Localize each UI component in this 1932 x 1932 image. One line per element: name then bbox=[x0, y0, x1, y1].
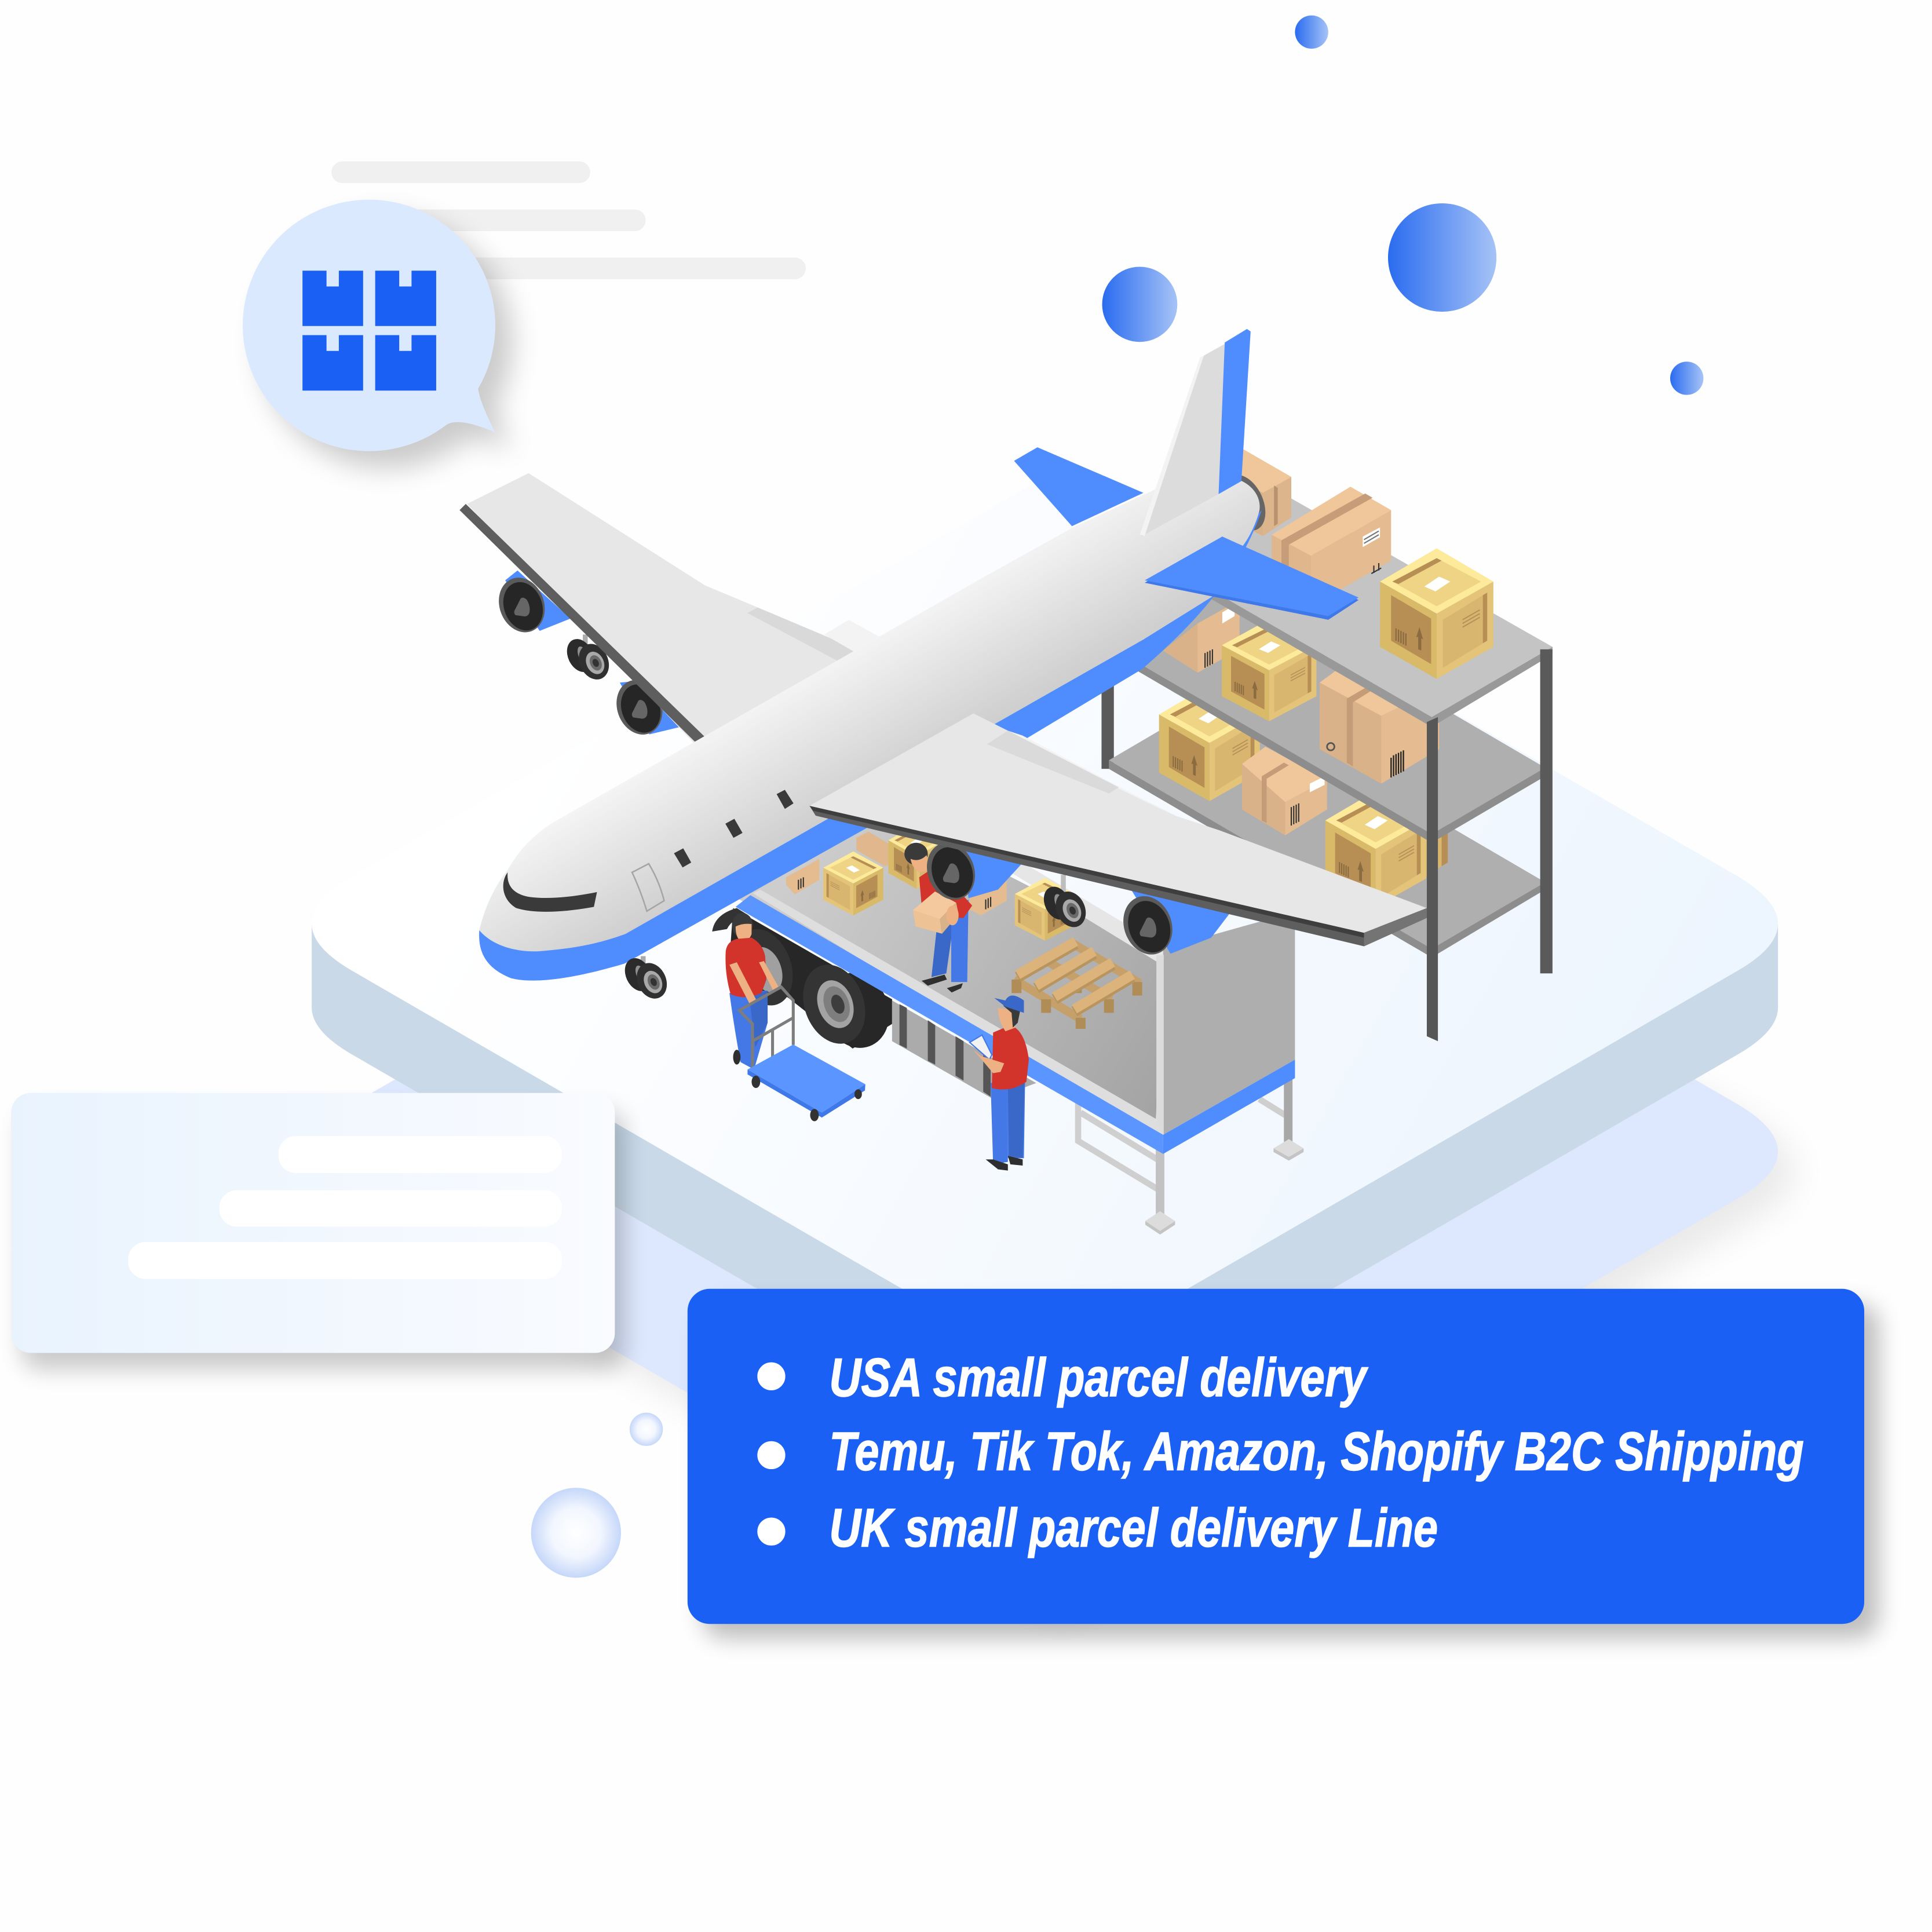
card bars bbox=[128, 1136, 562, 1279]
speech bubble with boxes icon bbox=[243, 200, 513, 469]
blue hand cart bbox=[739, 987, 865, 1121]
shelf left leg bbox=[1101, 685, 1114, 769]
shelf bottom level bbox=[1109, 693, 1545, 958]
hair bbox=[732, 913, 753, 938]
bullet list bbox=[758, 1347, 1804, 1558]
bullet list: USA small parcel delivery bbox=[829, 1347, 1368, 1408]
fuselage body bbox=[479, 480, 1260, 951]
face bbox=[911, 855, 930, 872]
shoe bbox=[733, 1050, 740, 1065]
shelf right leg bbox=[1540, 649, 1553, 973]
truck chassis and wheels bbox=[712, 908, 900, 1057]
legs bbox=[932, 900, 969, 982]
shelf top level bbox=[1109, 462, 1553, 727]
far stabilizer bbox=[1014, 447, 1144, 526]
near wing engine fans bbox=[919, 835, 983, 907]
shirt bbox=[725, 938, 766, 997]
hand bbox=[946, 905, 959, 925]
shirt bbox=[992, 1025, 1029, 1090]
wing surface bbox=[809, 713, 1427, 933]
blue services panel bbox=[688, 1289, 1879, 1639]
worker with clipboard bbox=[970, 996, 1029, 1171]
far wing gear bbox=[562, 634, 615, 684]
cockpit windshield bbox=[503, 872, 597, 912]
darker edge strip bbox=[809, 806, 1364, 938]
arms bbox=[729, 962, 757, 1006]
airplane far wing bbox=[459, 473, 887, 744]
carried box bbox=[913, 892, 959, 934]
worker carrying box bbox=[904, 843, 972, 992]
door outline bbox=[632, 864, 664, 911]
back cardboard box bbox=[1214, 448, 1291, 536]
worker with cart bbox=[725, 913, 780, 1069]
wing edge bbox=[809, 806, 1427, 946]
hair bbox=[1003, 1006, 1020, 1028]
near wing engine nacelles bbox=[963, 845, 1231, 954]
face bbox=[998, 1008, 1016, 1031]
far engine fans bbox=[491, 571, 552, 639]
big crate top shelf bbox=[1380, 548, 1493, 679]
truck trailer bbox=[736, 801, 1295, 1154]
legs bbox=[991, 1078, 1025, 1164]
bullet list: UK small parcel delivery Line bbox=[829, 1497, 1438, 1558]
far engine blue nacelles bbox=[505, 571, 680, 735]
blue belly bbox=[479, 510, 1262, 981]
near wing gear bbox=[1039, 875, 1091, 932]
small boxes on truck floor bbox=[786, 824, 1075, 941]
cardboard box behind crate bbox=[1163, 600, 1240, 673]
lower crate left bbox=[1159, 685, 1260, 801]
shelf middle level bbox=[1109, 579, 1545, 843]
airplane fuselage and tail bbox=[479, 329, 1358, 981]
wooden pallet bbox=[1014, 941, 1140, 1029]
wing tip side bbox=[1364, 908, 1427, 946]
shelf front leg bbox=[1427, 717, 1438, 1041]
far wing leading edge bbox=[459, 504, 705, 743]
large cardboard box middle shelf bbox=[1320, 669, 1439, 784]
near stabilizer bbox=[1145, 536, 1358, 620]
icon: four parcels bbox=[302, 271, 436, 390]
far wing flap bbox=[747, 608, 857, 662]
shirt bbox=[919, 870, 972, 918]
large cardboard box top shelf bbox=[1272, 487, 1391, 606]
face bbox=[736, 924, 751, 941]
windows bbox=[674, 790, 794, 867]
legs bbox=[729, 991, 768, 1069]
grey placeholder text bars bbox=[331, 162, 806, 279]
tail cone ring bbox=[1215, 468, 1274, 538]
light band bbox=[1008, 731, 1174, 816]
clipboard bbox=[970, 1035, 992, 1060]
truck side grate bbox=[892, 1000, 1036, 1099]
shoes bbox=[922, 974, 947, 986]
loading dock stand legs bbox=[1078, 1075, 1303, 1235]
pale bubbles bbox=[531, 1413, 663, 1578]
cap bbox=[994, 996, 1024, 1013]
middle platform with side wall bbox=[312, 477, 1778, 1455]
left placeholder card bbox=[11, 1093, 624, 1370]
head bbox=[904, 843, 928, 865]
lower crate right bbox=[1325, 791, 1448, 907]
vertical tail bbox=[1141, 342, 1227, 536]
shoes bbox=[986, 1159, 1008, 1171]
nose landing gear bbox=[620, 954, 673, 1003]
airplane near wing bbox=[809, 713, 1427, 962]
far wing surface bbox=[467, 473, 887, 744]
storage shelf bbox=[1101, 448, 1553, 1041]
middle crate bbox=[1222, 619, 1316, 721]
lower platform bbox=[312, 705, 1795, 1619]
near wing flap bbox=[987, 731, 1119, 794]
decorative blue circles bbox=[1102, 16, 1703, 395]
small centre piece bbox=[824, 620, 880, 653]
arm bbox=[973, 1050, 1004, 1073]
cardboard box bottom shelf bbox=[1242, 747, 1327, 835]
